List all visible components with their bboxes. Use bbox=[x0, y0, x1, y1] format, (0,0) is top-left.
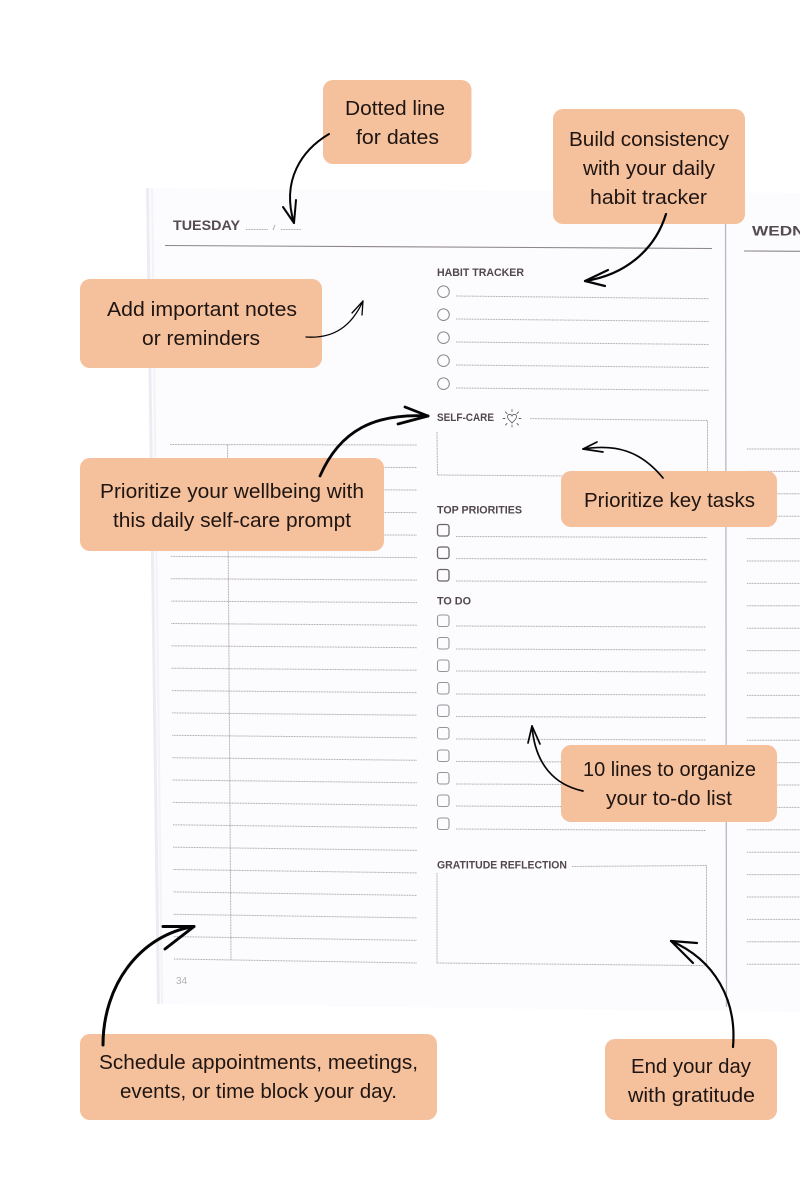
callout: gratitude: End your day bbox=[631, 1055, 752, 1078]
priority checkboxes bbox=[438, 524, 449, 581]
panel: Wednesday page bbox=[744, 222, 800, 964]
arrow: to top priorities bbox=[583, 442, 663, 478]
callout: dotted line for dates: Dotted line bbox=[345, 97, 445, 120]
panel: to do bbox=[437, 596, 706, 830]
arrow: to schedule bbox=[103, 926, 194, 1045]
callout: gratitude bbox=[605, 1039, 777, 1120]
callout: dotted line for dates: for dates bbox=[356, 126, 439, 149]
habit lines bbox=[456, 296, 709, 390]
callout: to-do list: 10 lines to organize bbox=[583, 758, 756, 781]
heading: Tuesday: TUESDAY bbox=[173, 217, 241, 233]
arrow: to notes area bbox=[306, 301, 363, 337]
planner spread bbox=[146, 188, 800, 1012]
self-care box bbox=[437, 419, 708, 477]
priority lines bbox=[456, 536, 707, 582]
callout: notes and reminders: or reminders bbox=[142, 327, 260, 350]
callout: key tasks: Prioritize key tasks bbox=[584, 489, 755, 512]
callout: self-care prompt bbox=[80, 458, 384, 551]
heading: self-care: SELF-CARE bbox=[437, 412, 494, 424]
callout: self-care prompt: this daily self-care prompt bbox=[113, 509, 351, 532]
icon: heart sun bbox=[503, 410, 521, 427]
to-do lines bbox=[456, 626, 706, 830]
to-do checkboxes bbox=[438, 615, 449, 830]
panel: self-care bbox=[437, 410, 708, 477]
callout: habit tracker: Build consistency bbox=[569, 128, 730, 151]
panel: gratitude reflection bbox=[437, 860, 706, 966]
panel: Tuesday page header bbox=[165, 217, 712, 248]
arrow: to self-care bbox=[320, 407, 428, 476]
callout: self-care prompt: Prioritize your wellbeing with bbox=[100, 480, 364, 503]
callout: to-do list: your to-do list bbox=[606, 787, 732, 810]
callout: habit tracker bbox=[553, 109, 745, 224]
callout: notes and reminders: Add important notes bbox=[107, 298, 297, 321]
callout: notes and reminders bbox=[80, 279, 322, 368]
callout: habit tracker: with your daily bbox=[582, 157, 716, 180]
callout: schedule bbox=[80, 1034, 437, 1120]
arrow: to gratitude box bbox=[671, 941, 733, 1047]
heading: habit tracker: HABIT TRACKER bbox=[437, 267, 524, 279]
Wednesday schedule lines bbox=[747, 449, 800, 964]
panel: habit tracker bbox=[437, 267, 709, 390]
heading: top priorities: TOP PRIORITIES bbox=[437, 504, 522, 516]
callout: gratitude: with gratitude bbox=[627, 1084, 755, 1107]
panel: hourly schedule bbox=[170, 444, 417, 963]
arrow: to date line bbox=[283, 134, 329, 223]
callout: schedule: Schedule appointments, meetings, bbox=[99, 1051, 418, 1074]
dotted date line bbox=[246, 225, 301, 230]
callout: dotted line for dates bbox=[323, 80, 472, 164]
habit circles bbox=[438, 286, 449, 390]
callout: to-do list bbox=[561, 745, 777, 822]
page number: 34 bbox=[176, 976, 188, 987]
page paper bbox=[146, 188, 800, 1012]
heading: gratitude reflection: GRATITUDE REFLECTION bbox=[437, 860, 567, 872]
arrow: to to-do list bbox=[528, 726, 583, 791]
callout: habit tracker: habit tracker bbox=[590, 186, 707, 209]
heading: to do: TO DO bbox=[437, 596, 471, 608]
arrow: to habit tracker bbox=[585, 214, 666, 286]
callout: schedule: events, or time block your day. bbox=[120, 1080, 397, 1103]
callout: key tasks bbox=[561, 471, 777, 527]
gratitude box bbox=[437, 866, 706, 966]
panel: top priorities bbox=[437, 504, 707, 582]
